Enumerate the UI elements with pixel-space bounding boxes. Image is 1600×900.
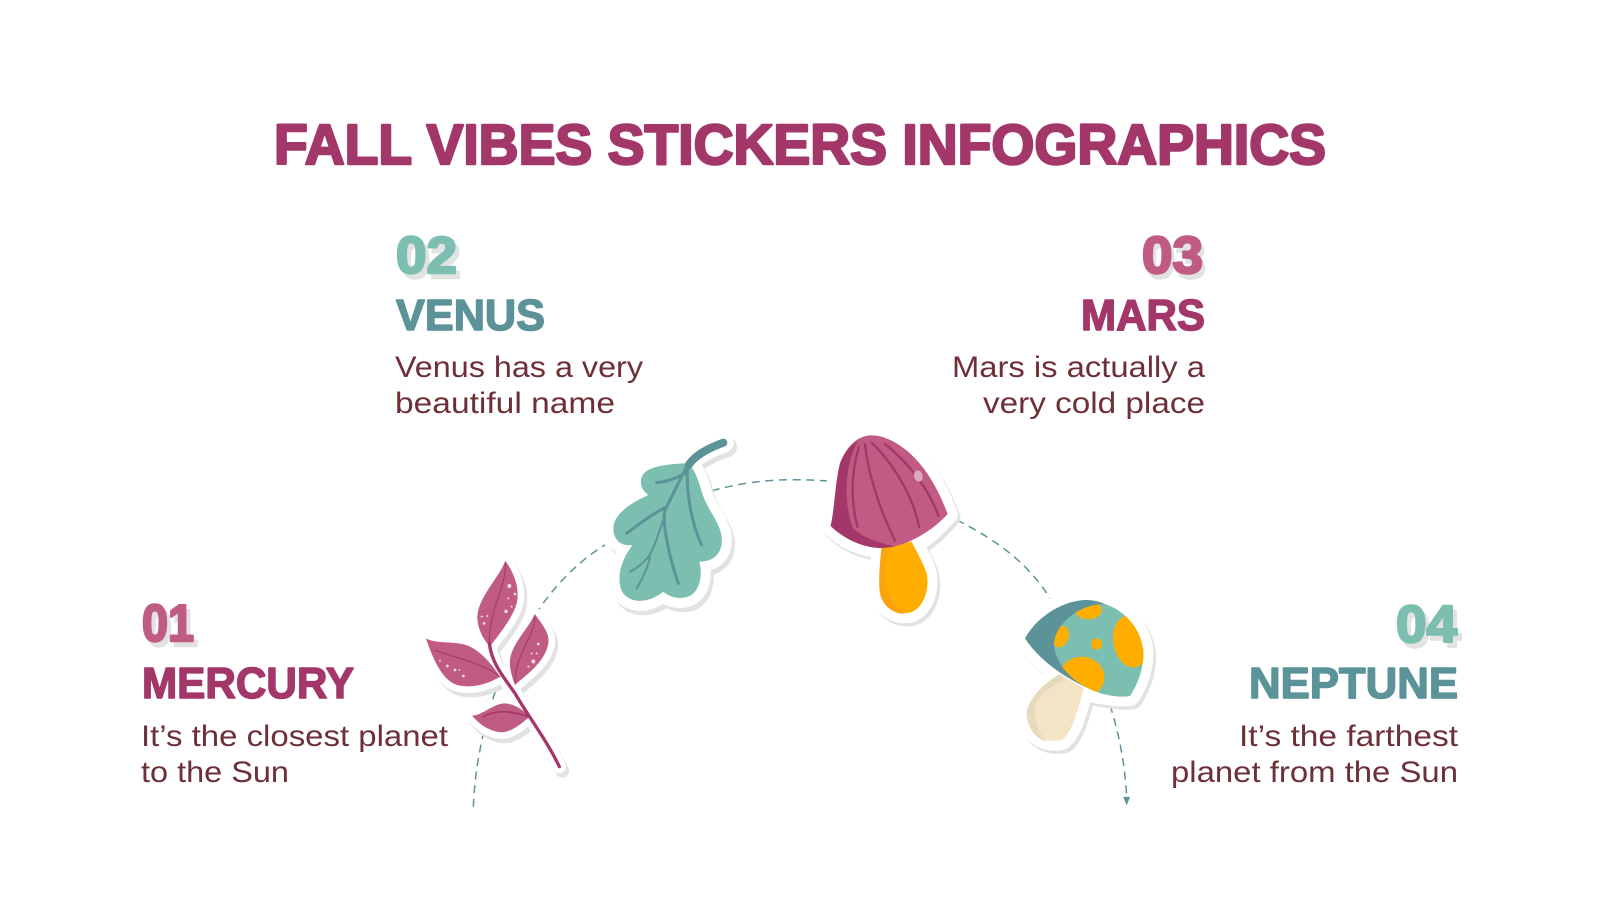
number 03: 03 xyxy=(1145,232,1206,290)
block 02 Venus xyxy=(395,227,643,420)
body Venus: Venus has a very xyxy=(395,351,643,384)
number 02: 02 xyxy=(400,232,461,290)
number 04: 04 xyxy=(1396,596,1457,654)
heading Neptune: NEPTUNE xyxy=(1249,659,1458,708)
heading Mars: MARS xyxy=(1081,291,1205,340)
sticker: pink branch xyxy=(426,561,562,771)
sticker: teal oak leaf xyxy=(613,443,727,605)
heading Mercury: MERCURY xyxy=(142,659,354,708)
number 01: 01 xyxy=(146,600,198,658)
body Neptune: It’s the farthest xyxy=(1239,720,1459,753)
number 04: 04 xyxy=(1400,601,1461,659)
number 01: 01 xyxy=(142,595,194,653)
body Venus: beautiful name xyxy=(395,387,615,420)
body Mercury: to the Sun xyxy=(141,756,289,789)
mushroom stem xyxy=(879,542,928,613)
block 03 Mars xyxy=(952,227,1206,420)
heading Venus: VENUS xyxy=(396,291,545,340)
title: FALL VIBES STICKERS INFOGRAPHICS xyxy=(274,113,1326,177)
block 01 Mercury xyxy=(141,595,449,789)
body Mars: very cold place xyxy=(983,387,1205,420)
arrow head xyxy=(1124,797,1129,804)
sticker: teal spotted mushroom xyxy=(1025,600,1152,744)
sticker: magenta mushroom xyxy=(831,435,950,616)
body Mercury: It’s the closest planet xyxy=(141,720,449,753)
dashed arc path with arrow xyxy=(473,480,1129,807)
block 04 Neptune xyxy=(1171,596,1461,789)
body Neptune: planet from the Sun xyxy=(1171,756,1458,789)
mushroom cap xyxy=(831,435,948,548)
body Mars: Mars is actually a xyxy=(952,351,1205,384)
number 03: 03 xyxy=(1142,227,1203,285)
number 02: 02 xyxy=(396,227,457,285)
